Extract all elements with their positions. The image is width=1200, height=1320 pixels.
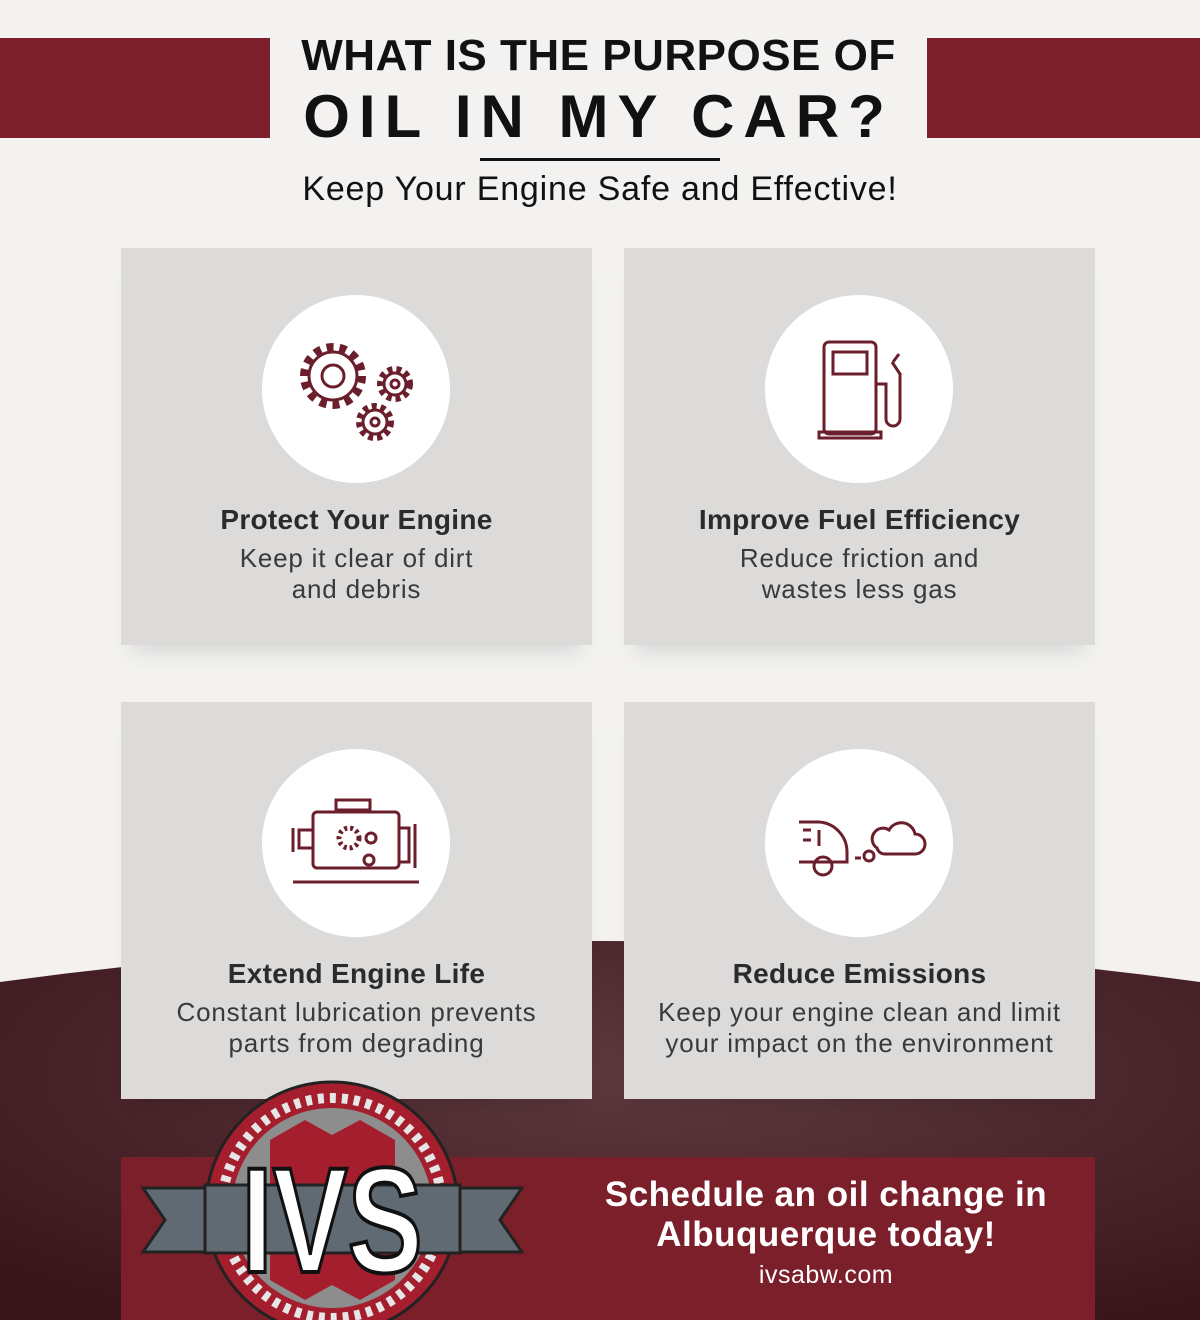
panel: extend life: parts from degrading — [229, 1028, 484, 1058]
title: OIL IN MY CAR? — [303, 83, 894, 150]
header bar right — [927, 38, 1200, 138]
panel: protect engine: Protect Your Engine — [220, 504, 493, 535]
panel: fuel efficiency: Reduce friction and — [740, 543, 979, 573]
panel: emissions: Keep your engine clean and limit — [658, 997, 1061, 1027]
panel: extend life — [121, 702, 592, 1099]
logo: IVS — [140, 1080, 525, 1320]
icon: exhaust cloud — [765, 749, 953, 937]
panel: emissions — [624, 702, 1095, 1099]
header bar left — [0, 38, 270, 138]
panel: fuel efficiency: Improve Fuel Efficiency — [699, 504, 1020, 535]
panel: fuel efficiency — [624, 248, 1095, 645]
CTA banner — [121, 1157, 1095, 1320]
subtitle: Keep Your Engine Safe and Effective! — [302, 170, 898, 208]
title — [301, 31, 896, 150]
panel: protect engine — [121, 248, 592, 645]
panel: extend life: Constant lubrication prevents — [177, 997, 536, 1027]
CTA text: Albuquerque today! — [656, 1215, 996, 1254]
icon: fuel pump — [765, 295, 953, 483]
panel: emissions: your impact on the environment — [665, 1028, 1054, 1058]
title: WHAT IS THE PURPOSE OF — [301, 31, 896, 80]
panel: protect engine: and debris — [292, 574, 421, 604]
logo: IVS: IVS — [241, 1137, 423, 1305]
panel: protect engine: Keep it clear of dirt — [240, 543, 473, 573]
CTA text — [605, 1175, 1047, 1289]
panel: emissions: Reduce Emissions — [733, 958, 986, 989]
CTA text: Schedule an oil change in — [605, 1175, 1047, 1214]
title underline — [480, 158, 720, 161]
icon: engine — [262, 749, 450, 937]
CTA text: ivsabw.com — [759, 1261, 893, 1289]
panel: extend life: Extend Engine Life — [228, 958, 485, 989]
panel: fuel efficiency: wastes less gas — [762, 574, 957, 604]
icon: gears — [262, 295, 450, 483]
